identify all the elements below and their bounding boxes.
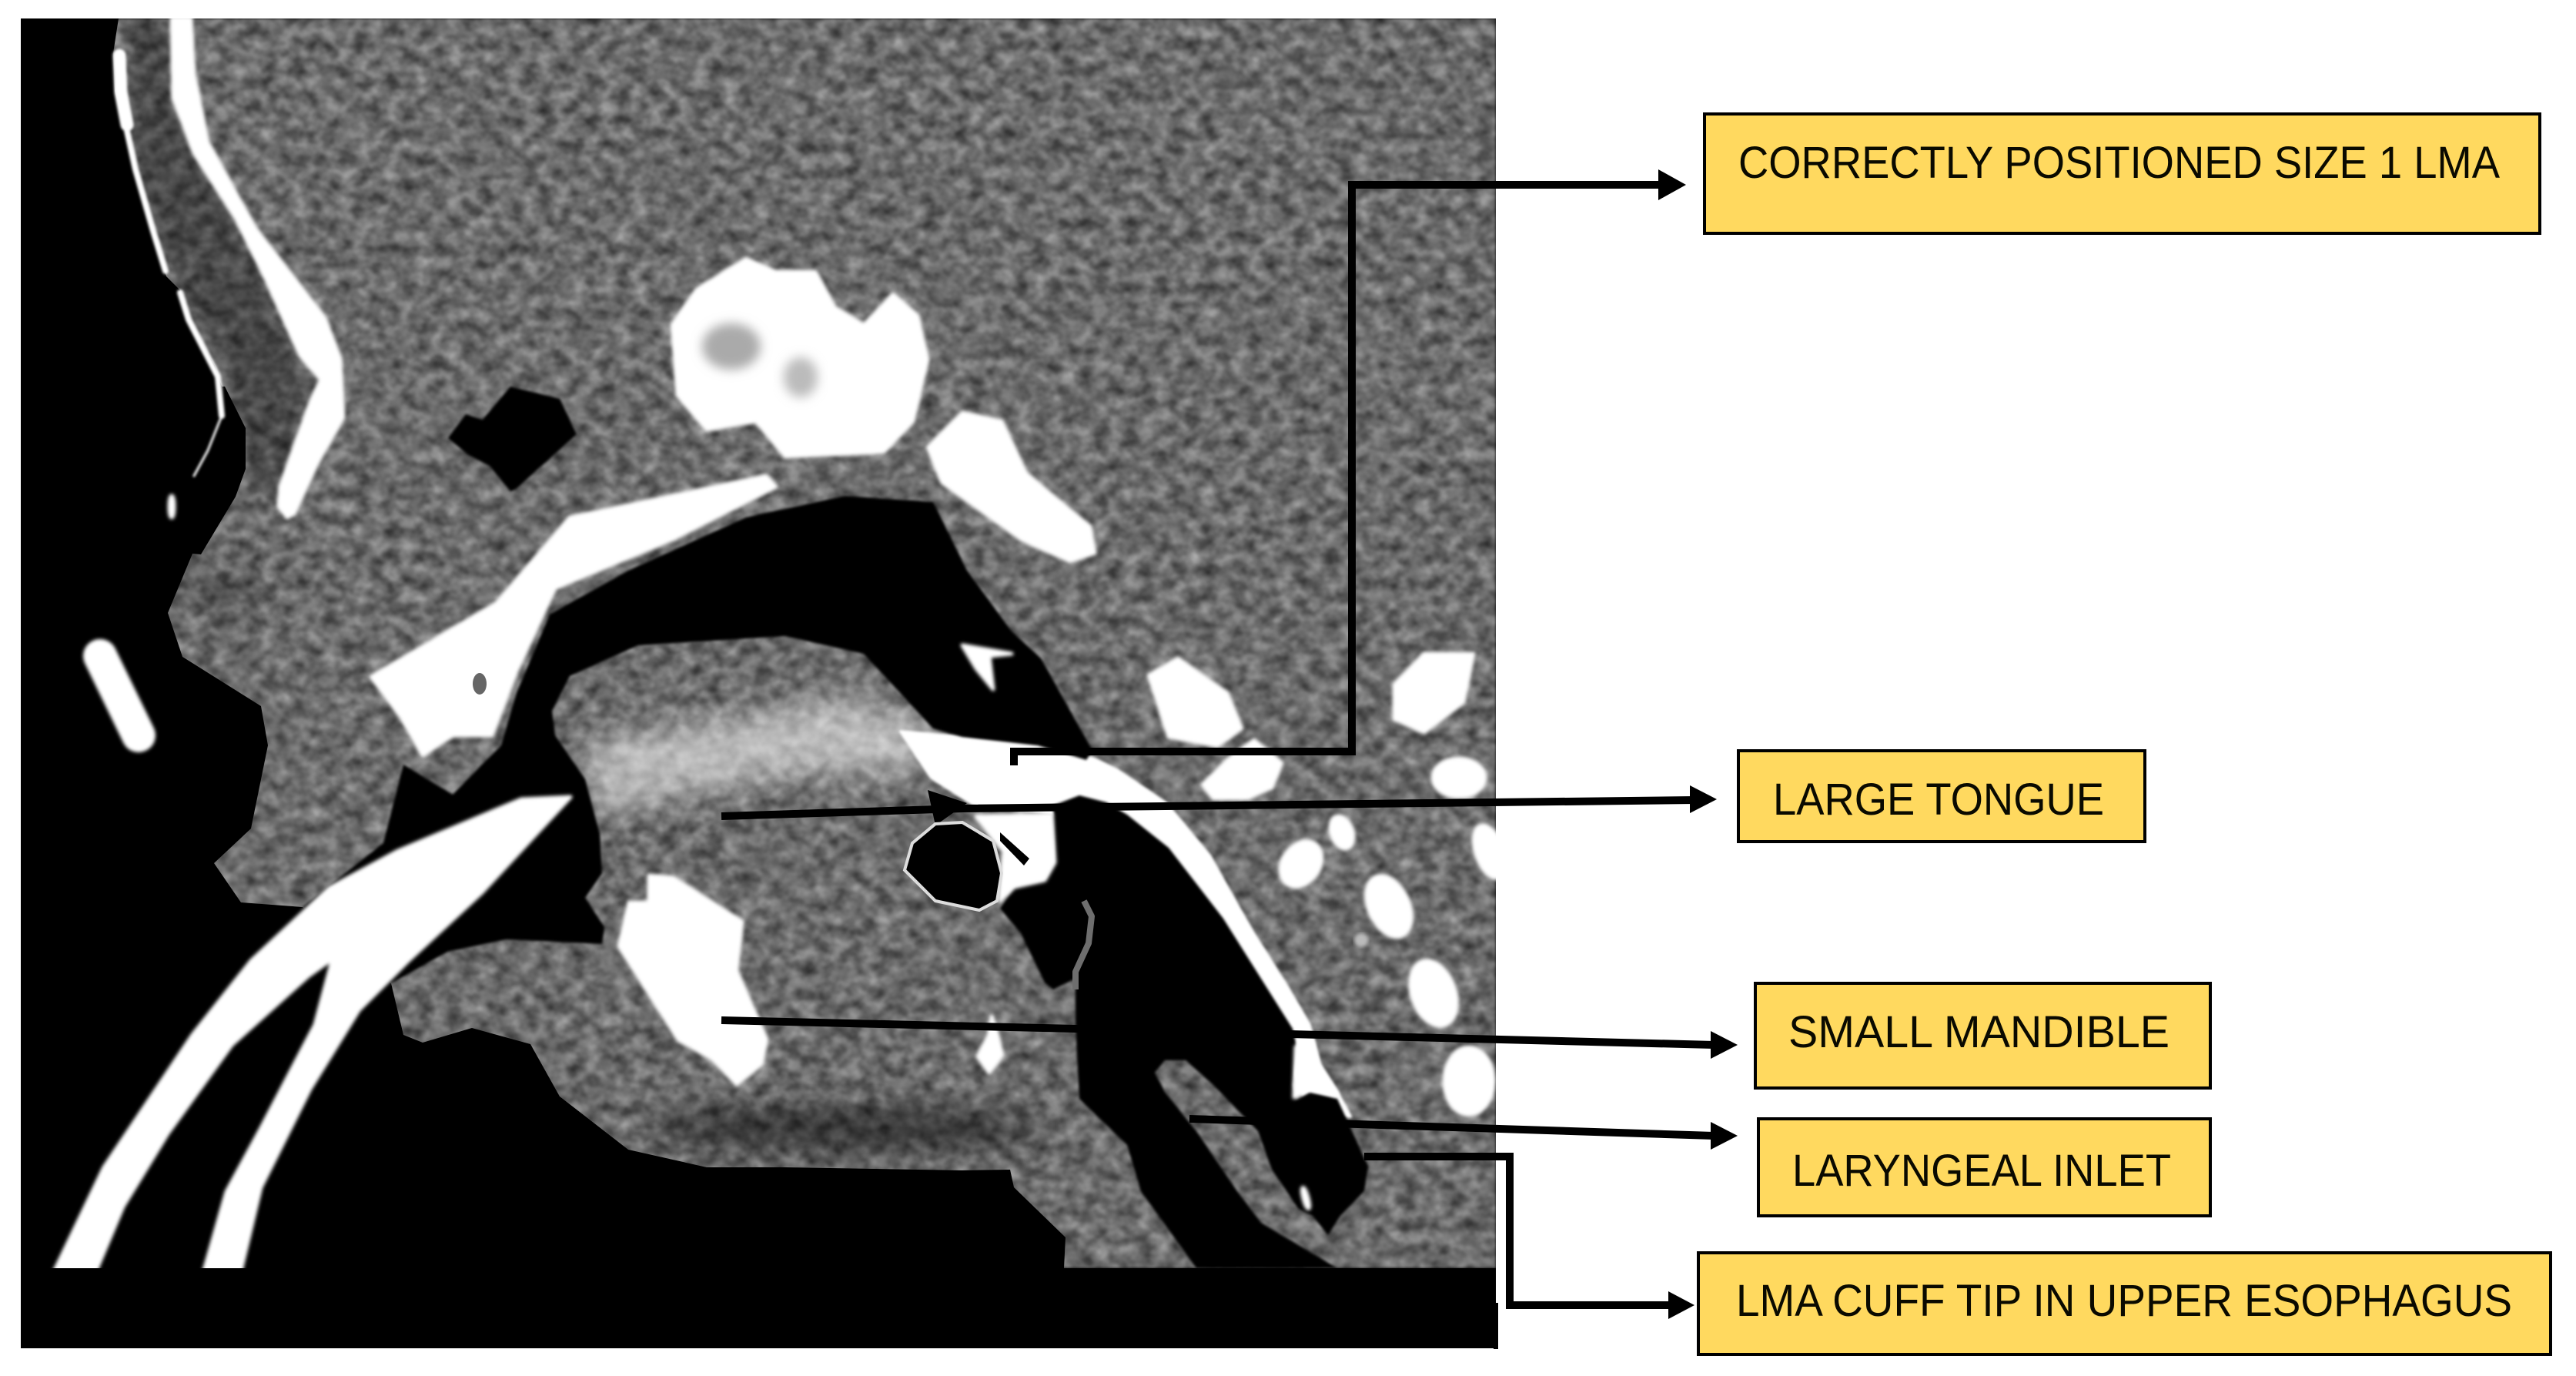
label: correctly positioned size 1 LMA [1705, 114, 2540, 233]
arrow: LMA cuff tip [1364, 1157, 1694, 1319]
vallecula wall [1076, 901, 1092, 989]
base black band [21, 1268, 1496, 1348]
palate hole [473, 673, 487, 695]
skin line [119, 55, 222, 476]
sphenoid marrow [702, 323, 761, 370]
hyoid region bone [976, 815, 1055, 901]
dark bar in hyoid [1000, 832, 1029, 865]
airway white curl [962, 645, 1012, 689]
vertebral faint calcification [1354, 933, 1368, 947]
panel: sagittal CT scan [21, 18, 1512, 1348]
small pharyngeal air pocket [928, 790, 967, 825]
dark submental band [647, 1111, 1047, 1145]
label: laryngeal inlet: LARYNGEAL INLET [1792, 1146, 2171, 1196]
cervical vertebra lower [1203, 740, 1282, 798]
LMA tube [55, 797, 570, 1271]
posterior vertebral element [1394, 654, 1474, 732]
sphenoid bone [672, 259, 928, 457]
external marker [100, 656, 139, 735]
small hyoid fragment [978, 1016, 1002, 1073]
oral cavity and upper airway [303, 496, 1095, 1009]
clivus [928, 413, 1095, 561]
label: large tongue [1738, 751, 2145, 842]
label: large tongue: LARGE TONGUE [1773, 775, 2104, 825]
sphenoid marrow second lobe [784, 357, 818, 397]
lower airway and LMA cuff [1000, 795, 1368, 1268]
panel bottom edge stub [1494, 1303, 1498, 1349]
label: LMA cuff tip in upper esophagus [1698, 1253, 2551, 1354]
tongue enhancement streak [589, 697, 932, 824]
label: small mandible [1755, 983, 2210, 1088]
cervical vertebra upper [1149, 658, 1242, 746]
LMA contrast band [901, 732, 1350, 1117]
mandible [619, 875, 767, 1084]
label: LMA cuff tip in upper esophagus: LMA CUFF TIP IN UPPER ESOPHAGUS [1736, 1276, 2512, 1326]
frontal sinus [448, 387, 577, 491]
hyoid cavity [905, 822, 1002, 910]
dark soft palate patch [189, 570, 258, 616]
arrow: small mandible [721, 1020, 1738, 1059]
soft tissue [113, 18, 1496, 1268]
label: laryngeal inlet [1758, 1119, 2210, 1216]
darker scalp band [127, 18, 308, 501]
skull vault [172, 18, 343, 517]
hard palate [371, 476, 776, 755]
arrow: laryngeal inlet [1189, 1119, 1738, 1150]
label: correctly positioned size 1 LMA: CORRECTLY POSITIONED SIZE 1 LMA [1738, 138, 2500, 188]
bones and tube [55, 18, 1512, 1271]
label: small mandible: SMALL MANDIBLE [1788, 1007, 2170, 1057]
posterior cuff white [1294, 1036, 1336, 1097]
arrow: large tongue [721, 785, 1717, 816]
arrow: correctly positioned LMA [1014, 169, 1686, 765]
